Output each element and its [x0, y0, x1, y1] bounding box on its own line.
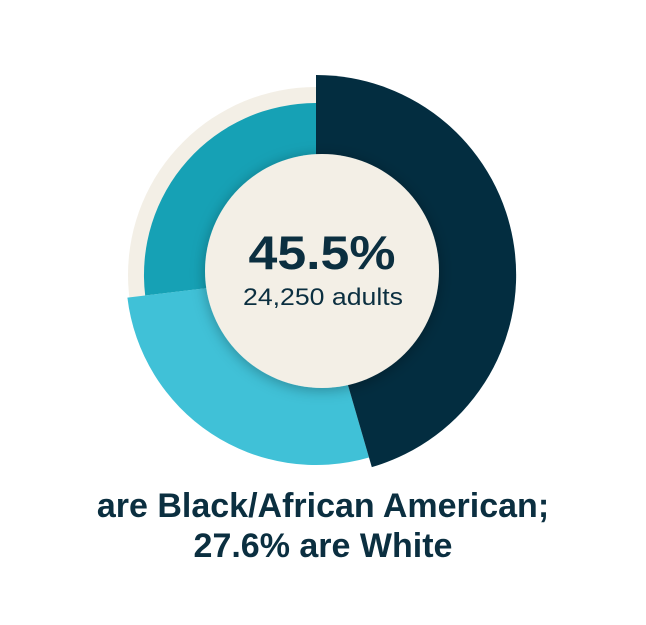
center sublabel: 24,250 adults — [243, 284, 403, 311]
caption: are Black/African American; — [97, 487, 549, 525]
segment: light cyan 27.6% White — [127, 275, 369, 465]
segment: teal remainder — [144, 103, 316, 295]
background ring — [128, 87, 504, 463]
segment: dark 45.5% Black/African American — [316, 75, 516, 467]
center circle — [205, 154, 439, 388]
caption: 27.6% are White — [194, 527, 452, 565]
caption — [97, 487, 549, 565]
center value: 45.5% — [248, 226, 396, 279]
